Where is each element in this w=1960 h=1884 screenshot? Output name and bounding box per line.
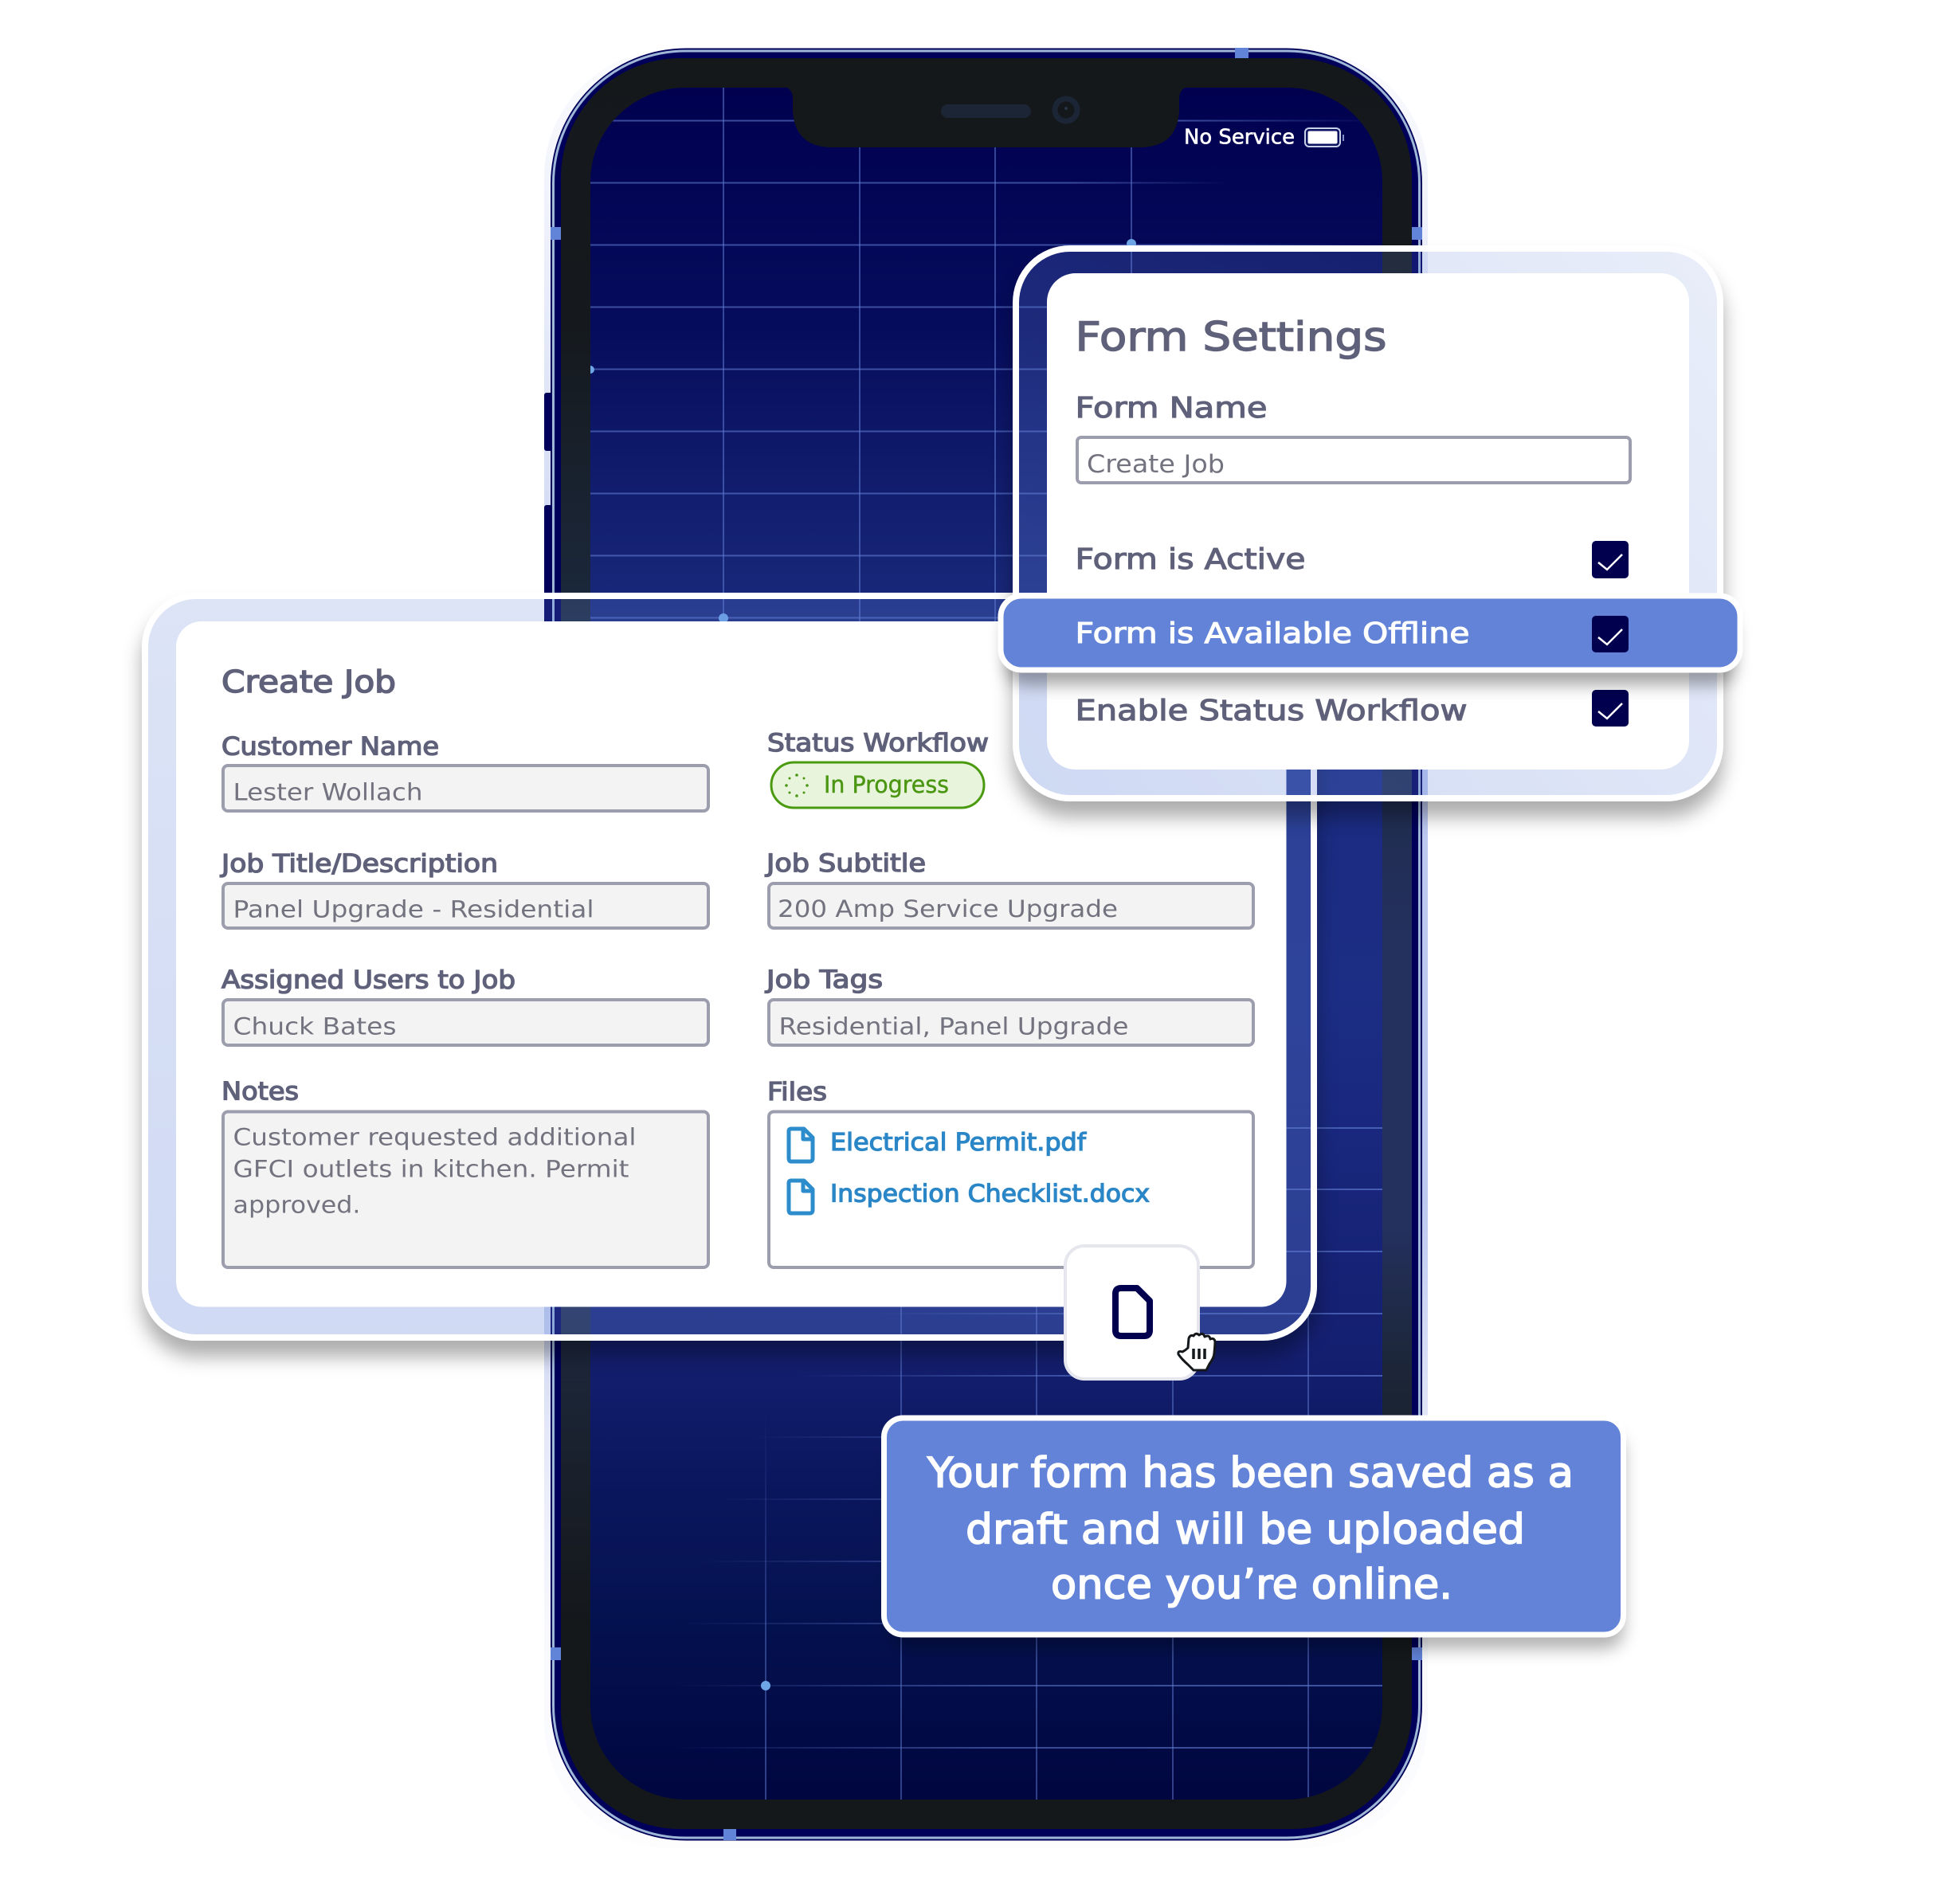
panel: create job card bbox=[142, 596, 1317, 1357]
field: customer name: Customer Name bbox=[221, 733, 439, 762]
field: notes: GFCI outlets in kitchen. Permit bbox=[233, 1155, 629, 1182]
field: form name: Create Job bbox=[1087, 450, 1225, 479]
callout box bbox=[884, 1418, 1624, 1635]
field: job title: Panel Upgrade - Residential bbox=[233, 895, 594, 922]
field: customer name bbox=[221, 733, 708, 811]
callout text: once you’re online. bbox=[1051, 1561, 1452, 1609]
bar label: Form is Available Offline bbox=[1076, 617, 1469, 650]
field: form name bbox=[1076, 392, 1630, 483]
notch bbox=[783, 87, 1189, 147]
field: files bbox=[767, 1078, 1253, 1267]
status pill bbox=[771, 762, 984, 808]
field: status workflow: Status Workflow bbox=[767, 729, 989, 758]
phone handles bbox=[551, 48, 1422, 1840]
phone bbox=[544, 48, 1428, 1848]
phone screen with grid bbox=[586, 88, 1382, 1800]
field: customer name: Lester Wollach bbox=[233, 779, 422, 806]
callout shadow bbox=[891, 1434, 1624, 1649]
card body bbox=[176, 621, 1286, 1306]
field: job subtitle bbox=[765, 849, 1253, 928]
field: job subtitle: Job Subtitle bbox=[765, 849, 926, 878]
bar checkbox bbox=[1592, 616, 1629, 652]
field: assigned users bbox=[221, 966, 708, 1045]
field: job title bbox=[220, 849, 708, 928]
field: form name: Form Name bbox=[1076, 392, 1267, 425]
bar body bbox=[1001, 596, 1740, 670]
icon: file 1 bbox=[789, 1129, 813, 1161]
field: job subtitle: 200 Amp Service Upgrade bbox=[778, 895, 1118, 922]
field: job title: Job Title/Description bbox=[220, 849, 498, 878]
battery icon bbox=[1305, 128, 1344, 147]
option: form is active bbox=[1076, 541, 1629, 578]
field: job tags: Job Tags bbox=[765, 966, 883, 994]
field: assigned users: Chuck Bates bbox=[233, 1013, 397, 1040]
field: status workflow bbox=[767, 729, 989, 808]
field: assigned users: Assigned Users to Job bbox=[221, 966, 515, 994]
highlight bar: form is available offline bbox=[1001, 596, 1740, 685]
card frame bbox=[145, 596, 1314, 1338]
option: enable status workflow: Enable Status Workflow bbox=[1076, 695, 1468, 727]
speaker bbox=[941, 104, 1031, 118]
heading: form settings: Form Settings bbox=[1076, 314, 1386, 360]
panel: form settings card bbox=[1001, 249, 1740, 817]
field: job tags: Residential, Panel Upgrade bbox=[779, 1013, 1128, 1040]
option: form is active: Form is Active bbox=[1076, 543, 1305, 576]
card frame bbox=[1016, 249, 1720, 798]
infographic canvas bbox=[131, 48, 1745, 1840]
field: notes: Notes bbox=[221, 1077, 299, 1106]
field: notes: approved. bbox=[233, 1192, 360, 1219]
heading: create job: Create Job bbox=[221, 664, 396, 699]
phone frame bbox=[551, 48, 1422, 1840]
grid dots bbox=[586, 239, 1136, 1690]
card shadow bbox=[1013, 261, 1723, 817]
field: notes: Customer requested additional bbox=[233, 1123, 636, 1150]
callout: saved as draft message bbox=[884, 1418, 1624, 1649]
icon: grab cursor bbox=[1178, 1334, 1215, 1370]
side buttons bbox=[544, 393, 555, 629]
callout text bbox=[927, 1450, 1574, 1609]
icon: file 2 bbox=[789, 1181, 813, 1213]
camera bbox=[1055, 99, 1077, 121]
icon: document bbox=[1115, 1288, 1150, 1336]
bar shadow bbox=[1005, 613, 1735, 685]
phone glow bbox=[544, 49, 1428, 1848]
field: job tags bbox=[765, 966, 1253, 1045]
link: electrical permit: Electrical Permit.pdf bbox=[830, 1129, 1088, 1157]
option: enable status workflow bbox=[1076, 690, 1629, 727]
callout text: draft and will be uploaded bbox=[966, 1506, 1525, 1553]
card tile bbox=[1065, 1246, 1198, 1379]
field: files: Files bbox=[767, 1078, 827, 1107]
dragged file card bbox=[1065, 1246, 1215, 1379]
status text: No Service bbox=[1184, 126, 1295, 150]
status pill: In Progress bbox=[824, 771, 949, 798]
card shadow bbox=[142, 609, 1317, 1357]
field: notes bbox=[221, 1077, 708, 1267]
callout text: Your form has been saved as a bbox=[927, 1450, 1574, 1498]
link: inspection checklist: Inspection Checklist.docx bbox=[830, 1181, 1150, 1208]
card body bbox=[1047, 273, 1689, 770]
